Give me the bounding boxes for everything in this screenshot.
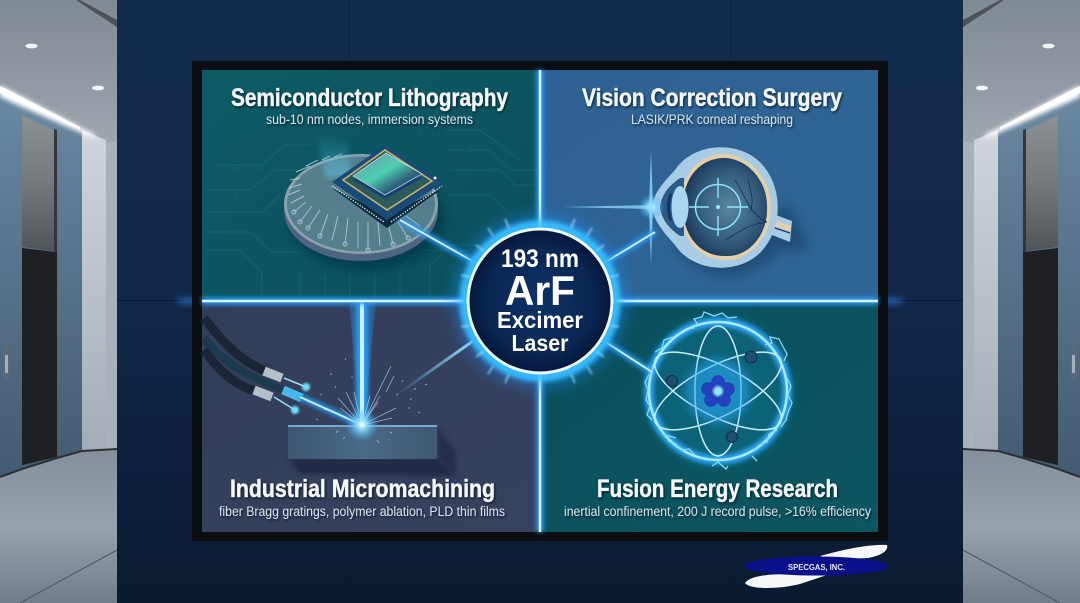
panel: vision correction surgery — [540, 70, 878, 301]
sparks — [316, 358, 427, 443]
central badge — [454, 215, 626, 387]
central badge: ArF — [505, 267, 575, 314]
wafer — [284, 154, 445, 270]
display wall column — [117, 0, 963, 603]
heading: Semiconductor Lithography — [231, 84, 508, 112]
panel background — [202, 70, 540, 301]
fiber cables — [204, 318, 306, 410]
panel: industrial micromachining — [202, 301, 540, 532]
lens — [672, 186, 688, 228]
background: lobby right — [963, 0, 1080, 603]
atom illustration — [644, 312, 792, 469]
heading: Industrial Micromachining — [230, 475, 495, 503]
panel: semiconductor lithography — [202, 70, 540, 301]
glow rays — [454, 215, 626, 387]
laser beams — [202, 70, 878, 532]
panel background — [540, 70, 878, 301]
work block — [288, 425, 456, 476]
logo swoosh — [745, 545, 887, 588]
targeting reticle — [689, 178, 748, 236]
panel: fusion energy research — [540, 301, 878, 532]
heading: Fusion Energy Research — [597, 475, 838, 503]
cornea flare — [562, 150, 664, 265]
vertical beam — [349, 301, 376, 425]
anterior chamber — [660, 178, 684, 236]
outer eyeball — [652, 147, 778, 268]
electron orbits — [644, 326, 792, 456]
electrons — [666, 351, 757, 442]
lightning arcs — [645, 312, 792, 469]
badge disc — [468, 229, 612, 373]
circuit traces — [205, 110, 538, 300]
logo text: SPECGAS, INC. — [788, 562, 845, 572]
heading: Vision Correction Surgery — [582, 84, 842, 112]
optic nerve — [764, 212, 792, 242]
fiber tips — [302, 383, 310, 391]
subheading: sub-10 nm nodes, immersion systems — [266, 112, 473, 127]
nucleus glow — [686, 359, 750, 423]
blood vessels — [725, 180, 767, 240]
badge glow — [456, 217, 624, 385]
central badge: Excimer — [497, 307, 583, 333]
energy ring — [649, 322, 787, 460]
microchip — [332, 145, 443, 228]
panel background — [202, 301, 540, 532]
panel background — [540, 301, 878, 532]
screen frame — [176, 61, 904, 541]
background: lobby left — [0, 0, 117, 603]
subheading: LASIK/PRK corneal reshaping — [631, 112, 793, 127]
subheading: fiber Bragg gratings, polymer ablation, PLD thin films — [219, 504, 505, 519]
subheading: inertial confinement, 200 J record pulse, >16% efficiency — [564, 504, 871, 519]
logo oval — [744, 556, 888, 576]
eye illustration — [562, 147, 810, 276]
light beam onto chip — [316, 135, 352, 178]
impact spot — [345, 408, 379, 442]
beam from fiber — [300, 397, 362, 425]
logo: Specgas, Inc. — [744, 545, 888, 588]
badge text: 193 nm — [501, 245, 579, 273]
nucleus — [702, 376, 734, 406]
central badge: Laser — [512, 330, 569, 356]
